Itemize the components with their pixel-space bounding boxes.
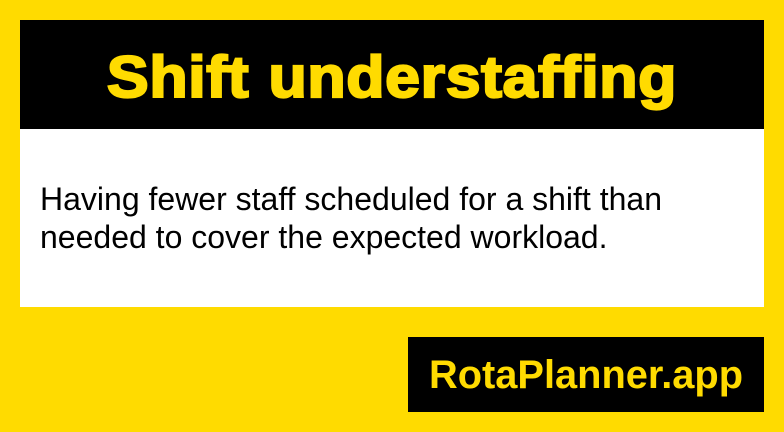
definition text: Having fewer staff scheduled for a shift than [40,181,662,217]
title: Shift understaffing [107,45,677,110]
brand badge [408,337,764,412]
definition text [40,181,662,255]
definition panel [20,129,764,307]
title banner [20,20,764,129]
definition text: needed to cover the expected workload. [40,219,607,255]
brand name: RotaPlanner.app [429,353,743,397]
